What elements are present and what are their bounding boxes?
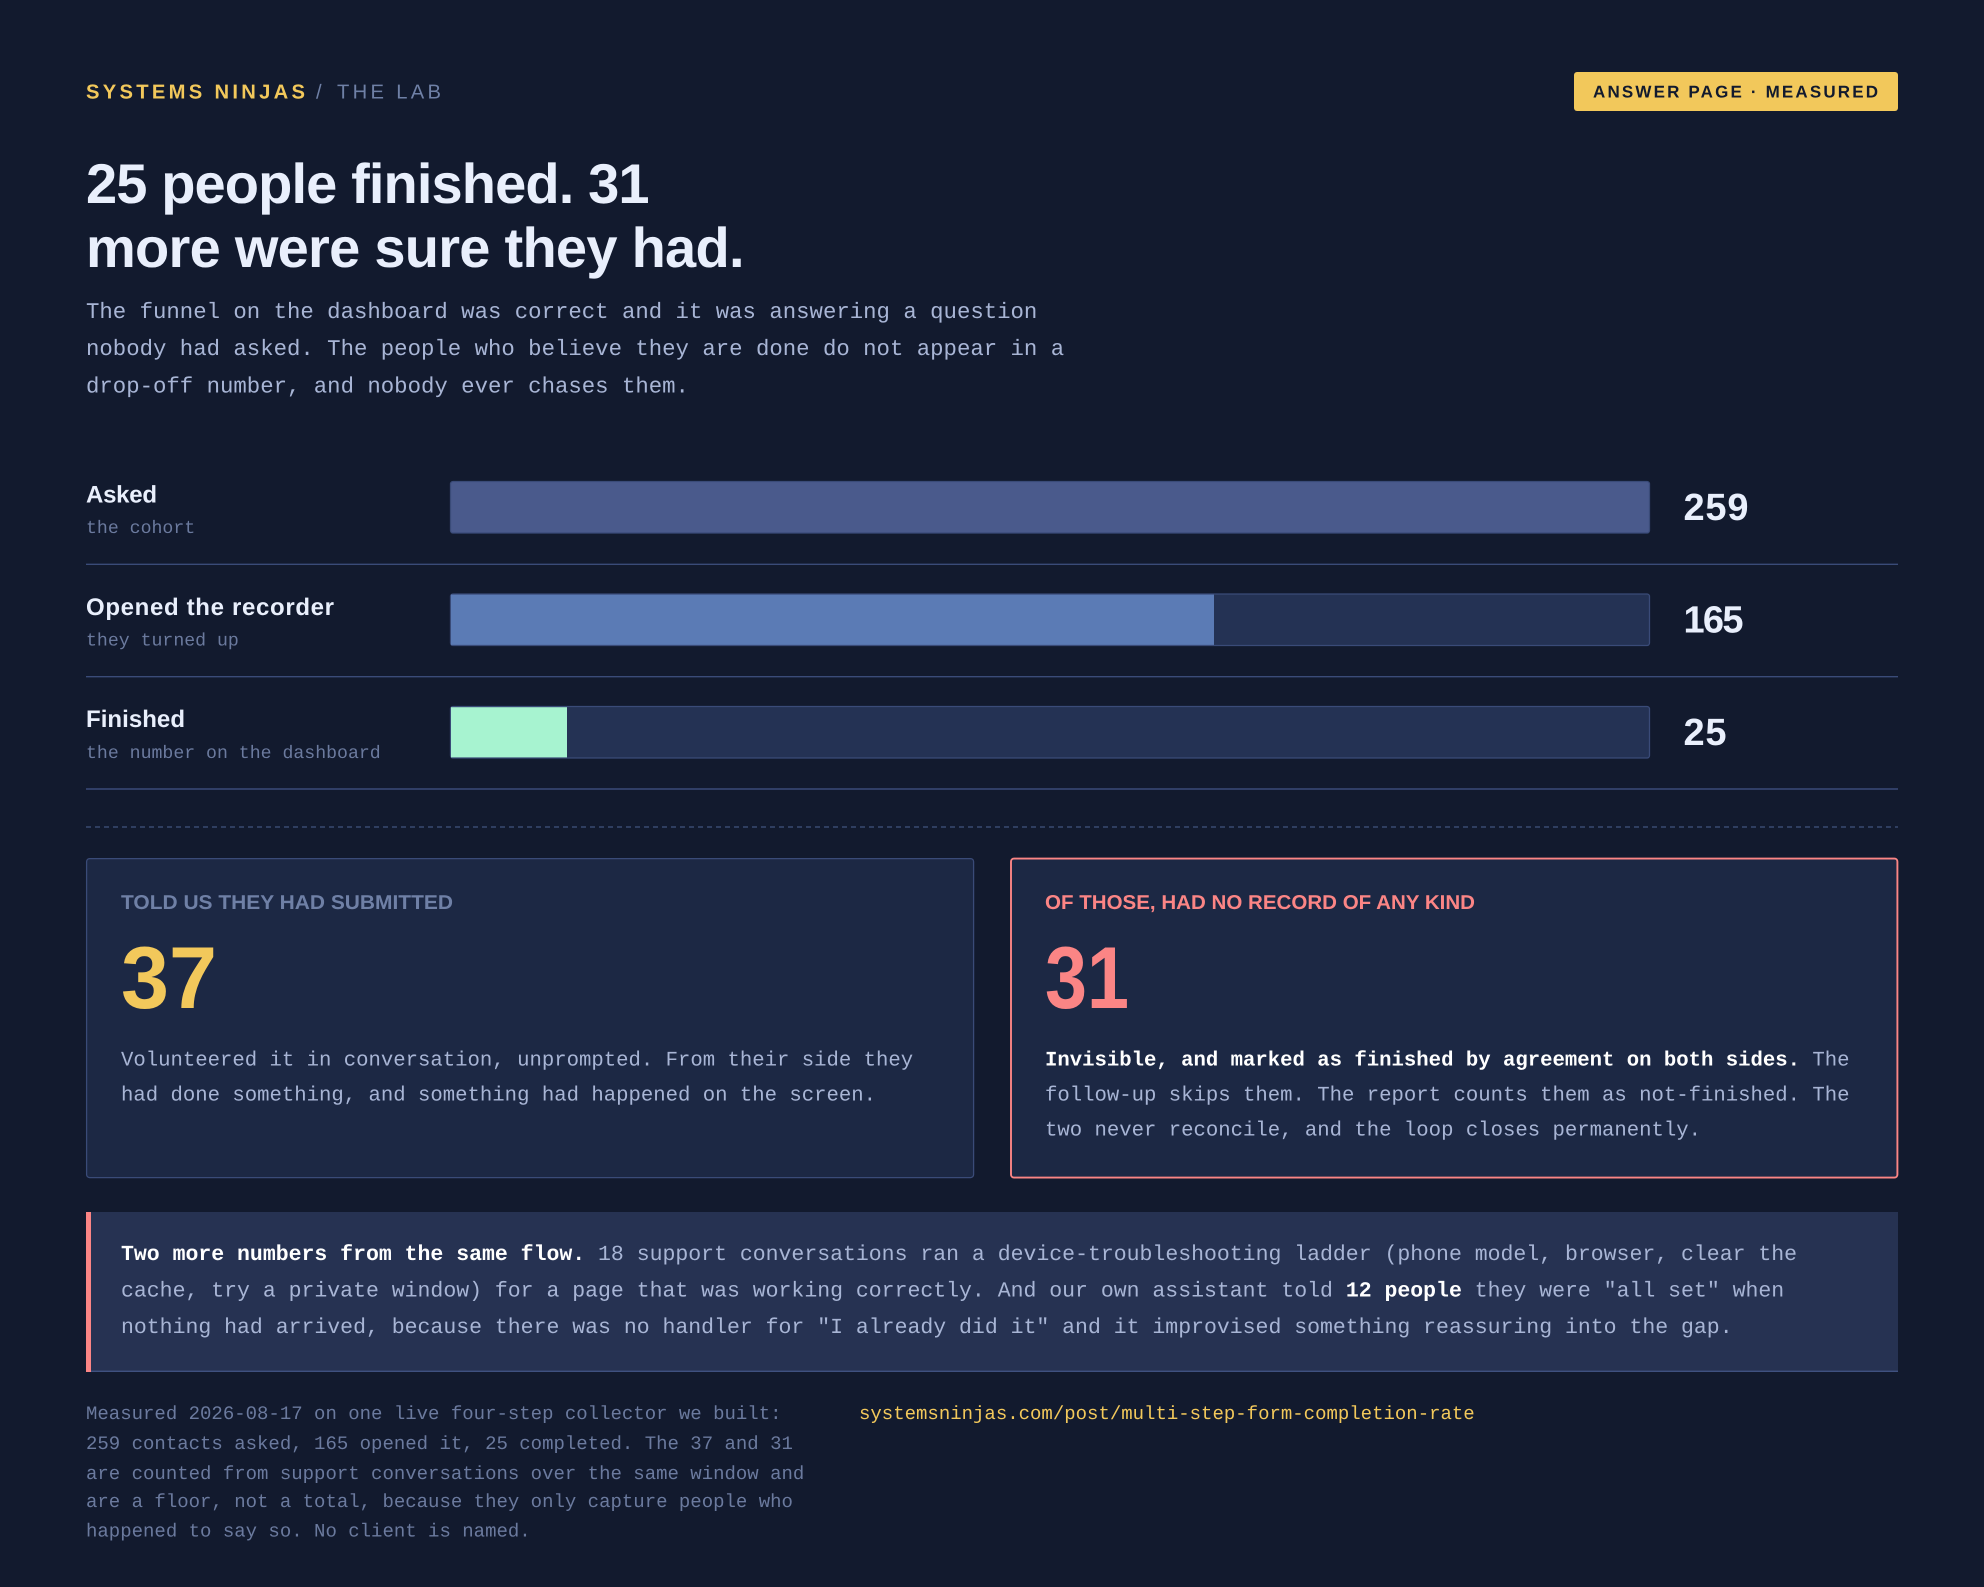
panel: of those, had no record <box>1011 859 1897 1178</box>
callout: two more numbers: Two more numbers from the same flow. 18 support conversations ran a device-troubleshooting ladder (phone model, browser, clear the <box>121 1243 1797 1267</box>
row: opened the recorder: 165 <box>1684 600 1744 642</box>
footnote: methodology: are a floor, not a total, because they only capture people who <box>86 1491 793 1513</box>
row: asked <box>86 482 1898 564</box>
panel: of those, had no record: 31 <box>1045 928 1129 1027</box>
panel: of those, had no record: Invisible, and marked as finished by agreement on both sides. The <box>1045 1050 1850 1073</box>
panel: told us they had submitted: Volunteered it in conversation, unprompted. From their side they <box>121 1050 913 1073</box>
eyebrow: brand and section: THE LAB <box>337 82 441 104</box>
callout: two more numbers: cache, try a private window) for a page that was working correctly. And our own assistant told 12 people they were "all set" when <box>121 1280 1784 1304</box>
eyebrow: brand and section: SYSTEMS NINJAS <box>86 82 305 104</box>
footnote: methodology: 259 contacts asked, 165 opened it, 25 completed. The 37 and 31 <box>86 1433 793 1455</box>
row: asked: Asked <box>86 482 157 508</box>
title: more were sure they had. <box>86 216 744 279</box>
panel: of those, had no record: OF THOSE, HAD NO RECORD OF ANY KIND <box>1045 892 1475 914</box>
eyebrow: brand and section <box>86 82 441 104</box>
title: 25 people finished. 31 <box>86 152 650 215</box>
intro paragraph: The funnel on the dashboard was correct and it was answering a question <box>86 299 1037 325</box>
callout: two more numbers: nothing had arrived, because there was no handler for "I already did it" and it improvised something reassuring into the gap. <box>121 1316 1733 1340</box>
footnote: methodology: happened to say so. No client is named. <box>86 1521 531 1543</box>
row: finished <box>86 706 1898 789</box>
row: finished: 25 <box>1684 712 1726 754</box>
source link: systemsninjas.com/post/multi-step-form-completion-rate <box>859 1403 1475 1425</box>
intro paragraph: nobody had asked. The people who believe they are done do not appear in a <box>86 336 1064 362</box>
panel: told us they had submitted: 37 <box>121 928 217 1027</box>
eyebrow: brand and section: / <box>316 82 322 104</box>
intro paragraph: drop-off number, and nobody ever chases them. <box>86 374 689 400</box>
panel: of those, had no record: two never reconcile, and the loop closes permanently. <box>1045 1120 1701 1142</box>
panel: told us they had submitted: TOLD US THEY HAD SUBMITTED <box>121 892 453 914</box>
badge: answer page measured: ANSWER PAGE · MEASURED <box>1593 82 1878 102</box>
row: opened the recorder: they turned up <box>86 632 239 652</box>
row: opened the recorder: Opened the recorder <box>86 594 334 621</box>
row: asked: the cohort <box>86 519 195 539</box>
row: finished: the number on the dashboard <box>86 744 381 764</box>
callout: two more numbers <box>86 1212 1898 1372</box>
row: asked: 259 <box>1684 487 1748 529</box>
panel: told us they had submitted: had done something, and something had happened on the screen. <box>121 1085 876 1108</box>
footnote: methodology: Measured 2026-08-17 on one live four-step collector we built: <box>86 1403 782 1425</box>
footnote: methodology: are counted from support conversations over the same window and <box>86 1463 804 1485</box>
row: opened the recorder <box>86 594 1898 677</box>
funnel bar chart <box>86 482 1898 789</box>
panel: told us they had submitted <box>87 859 974 1178</box>
row: finished: Finished <box>86 706 185 733</box>
intro paragraph <box>86 299 1064 400</box>
footnote: methodology <box>86 1403 804 1543</box>
panel: of those, had no record: follow-up skips them. The report counts them as not-finished. The <box>1045 1085 1850 1108</box>
badge: answer page measured <box>1574 72 1898 111</box>
title <box>86 152 744 279</box>
